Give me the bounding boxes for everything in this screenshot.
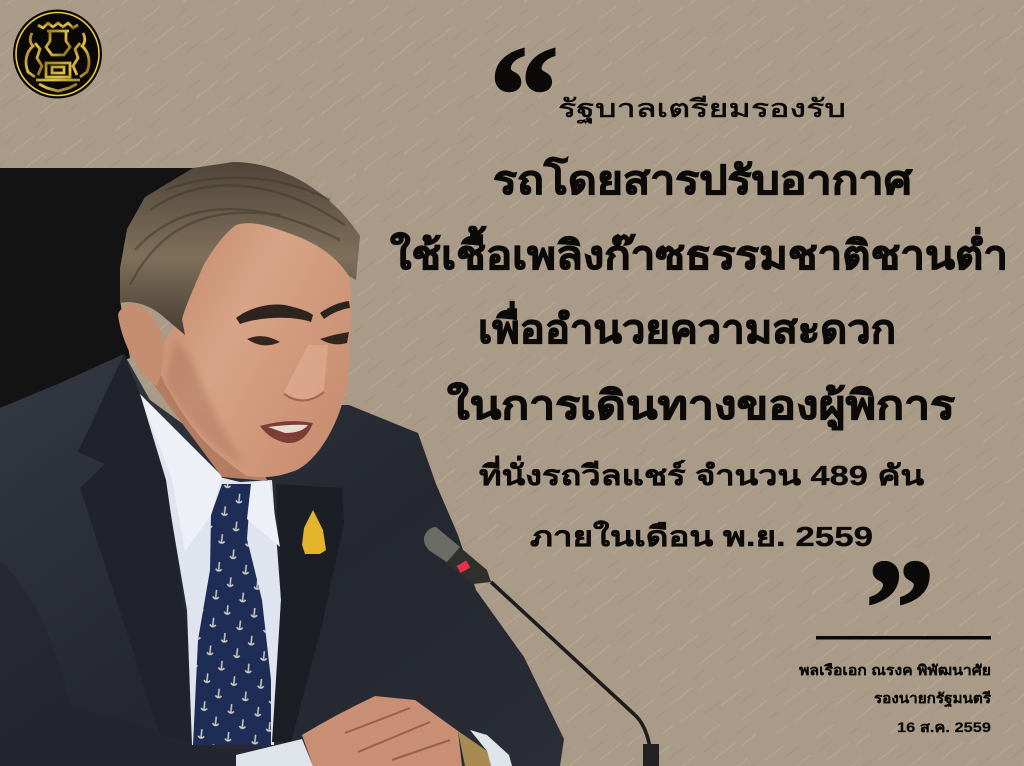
attribution xyxy=(799,662,992,735)
mic stem xyxy=(491,582,652,766)
face xyxy=(160,223,351,477)
lapel pin xyxy=(302,510,326,554)
line: disabled travellers: ในการเดินทางของผู้พิการ xyxy=(447,382,956,430)
hair strands xyxy=(130,178,345,285)
shirt cuff xyxy=(236,739,313,766)
closing quotation mark: ” xyxy=(865,531,935,686)
photo: speaker xyxy=(0,162,564,766)
date: 16 ส.ค. 2559 xyxy=(897,719,991,735)
mic LED xyxy=(457,561,470,573)
suit jacket xyxy=(0,354,564,766)
wristwatch xyxy=(458,731,491,766)
necktie xyxy=(193,484,271,745)
speaker name: พลเรือเอก ณรงค พิพัฒนาศัย xyxy=(799,662,991,678)
right lapel xyxy=(272,484,344,742)
eyes xyxy=(247,332,349,345)
speaker title: รองนายกรัฐมนตรี xyxy=(874,690,992,708)
line: NGV fuel: ใช้เชื้อเพลิงก๊าซธรรมชาติชานต่ำ xyxy=(390,226,1008,278)
chair back xyxy=(0,168,195,408)
mouth xyxy=(260,421,313,443)
ear xyxy=(118,304,164,386)
eyebrows xyxy=(236,301,350,324)
line: deadline: ภายในเดือน พ.ย. 2559 xyxy=(530,520,873,552)
microphone xyxy=(424,527,659,766)
cheek shadow xyxy=(165,340,245,465)
shirt xyxy=(140,394,281,745)
sleeve shading xyxy=(0,560,236,766)
shirt collar xyxy=(140,394,280,551)
hair xyxy=(120,162,360,335)
line: air-conditioned buses: รถโดยสารปรับอากาศ xyxy=(493,157,913,203)
right cuff xyxy=(470,730,512,766)
quote text xyxy=(390,95,1008,552)
line: convenience: เพื่ออำนวยความสะดวก xyxy=(478,301,896,352)
icon: government seal xyxy=(13,10,102,98)
left lapel xyxy=(78,354,191,742)
nose xyxy=(284,345,328,400)
opening quotation mark: “ xyxy=(489,18,559,173)
clasped hands xyxy=(302,696,462,766)
attribution rule xyxy=(816,636,991,640)
mic base xyxy=(643,744,659,766)
line: wheelchair buses count: ที่นั่งรถวีลแชร์ จำนวน 489 คัน xyxy=(479,455,924,491)
neck xyxy=(150,370,268,481)
line: intro: รัฐบาลเตรียมรองรับ xyxy=(558,95,846,123)
mic head xyxy=(424,527,491,584)
